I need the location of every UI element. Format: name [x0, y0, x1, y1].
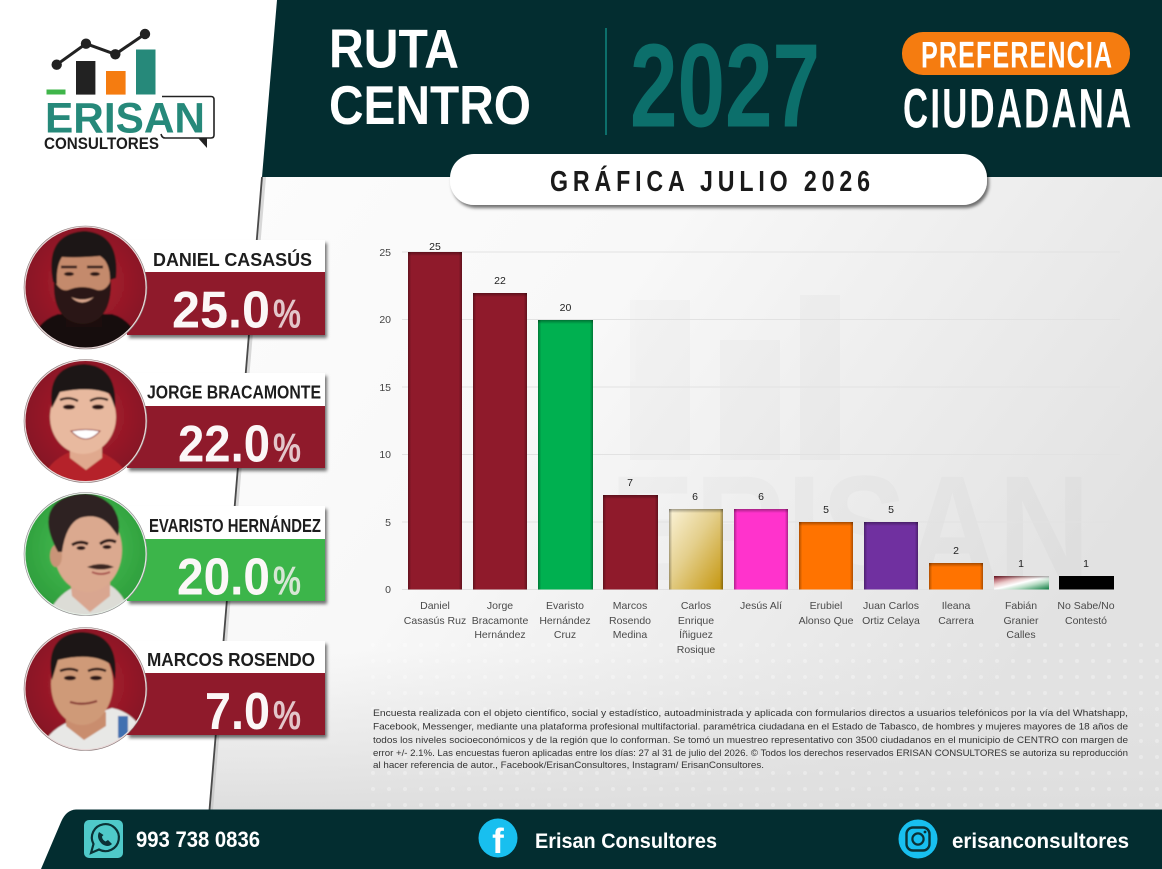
bar: Marcos Rosendo Medina: [603, 477, 658, 641]
bar: Carlos Enrique Íñiguez Rosique: Enrique: [678, 615, 714, 627]
bar: Juan Carlos Ortiz Celaya: 5: [888, 504, 894, 516]
bar: Marcos Rosendo Medina: Rosendo: [609, 615, 651, 627]
result card: Jorge Bracamonte: 22.0: [178, 416, 270, 474]
y axis labels: 25: [379, 247, 391, 259]
bar: Juan Carlos Ortiz Celaya: [862, 504, 920, 627]
icon: Facebook: [478, 818, 518, 861]
chart subtitle pill: GRÁFICA JULIO 2026: [550, 164, 870, 198]
title: Ruta Centro: CENTRO: [329, 74, 531, 136]
bar: Carlos Enrique Íñiguez Rosique: Íñiguez: [679, 628, 713, 641]
y axis labels: 0: [385, 584, 391, 596]
bar: Ileana Carrera: Ileana: [942, 600, 970, 612]
bar: Erubiel Alonso Que: [799, 504, 854, 627]
bar: Fabián Granier Calles: 1: [1018, 558, 1024, 570]
bar: Jorge Bracamonte Hernández: Jorge: [487, 600, 513, 612]
y axis labels: 15: [379, 382, 391, 394]
contact: WhatsApp: 993 738 0836: [136, 827, 260, 852]
bar: Marcos Rosendo Medina: Marcos: [613, 600, 647, 612]
methodology note: Facebook, Messenger, mediante una plataforma profesional multifactorial. paramétrica ciudadana en el Estado de Tabasco, de hombres y mujeres mayores de 18 años de: [373, 722, 1128, 732]
bar: Daniel Casasús Ruz: 25: [429, 241, 441, 253]
result card: Jorge Bracamonte: %: [273, 424, 301, 470]
contact: Instagram: [898, 820, 1129, 858]
contact: WhatsApp: [84, 820, 260, 858]
y axis labels: 10: [379, 449, 391, 461]
result card: Evaristo Hernández: EVARISTO HERNÁNDEZ: [149, 515, 321, 536]
bar: Evaristo Hernández Cruz: 20: [560, 302, 571, 314]
methodology note: Encuesta realizada con el objeto científico, social y estadístico, autoadministrada y aplicada con formularios directos a usuarios telefónicos por la vía del Whatshapp,: [373, 708, 1128, 718]
bar: Fabián Granier Calles: Calles: [1006, 629, 1036, 641]
portrait: Evaristo Hernández: [24, 492, 148, 618]
contact: Facebook: Erisan Consultores: [535, 830, 717, 853]
y axis labels: 20: [379, 314, 391, 326]
result card: Evaristo Hernández: [24, 492, 325, 618]
methodology note: [373, 708, 1128, 770]
bar: Daniel Casasús Ruz: Casasús Ruz: [404, 615, 466, 627]
bar: Carlos Enrique Íñiguez Rosique: 6: [692, 491, 698, 503]
y axis labels: 5: [385, 517, 391, 529]
bar: No Sabe/No Contestó: [1057, 558, 1115, 627]
bar: Jorge Bracamonte Hernández: Hernández: [474, 629, 526, 641]
bar: Carlos Enrique Íñiguez Rosique: Rosique: [677, 644, 715, 656]
contact: Instagram: erisanconsultores: [952, 830, 1129, 853]
bar: Evaristo Hernández Cruz: Hernández: [539, 615, 591, 627]
chart subtitle pill: [450, 154, 987, 205]
portrait: Marcos Rosendo: [24, 628, 148, 752]
result card: Marcos Rosendo: 7.0: [205, 683, 270, 741]
bar: Juan Carlos Ortiz Celaya: Ortiz Celaya: [862, 615, 920, 627]
result card: Evaristo Hernández: 20.0: [177, 548, 270, 606]
bar: Ileana Carrera: [929, 545, 983, 627]
portrait: Daniel Casasús: [24, 226, 148, 350]
bar: Evaristo Hernández Cruz: Evaristo: [546, 600, 584, 612]
bar: Erubiel Alonso Que: Alonso Que: [799, 615, 854, 627]
contact: Facebook: [478, 818, 717, 861]
bar: Jesús Alí: [734, 491, 788, 612]
icon: Facebook: f: [492, 822, 504, 861]
bar: No Sabe/No Contestó: No Sabe/No: [1057, 600, 1115, 612]
grid lines: [402, 252, 1120, 590]
bar: Carlos Enrique Íñiguez Rosique: Carlos: [681, 600, 711, 612]
panel divider: [209, 177, 266, 810]
title: Ruta Centro: [329, 18, 531, 136]
header band: [262, 0, 1162, 177]
result card: Daniel Casasús: [24, 226, 325, 350]
result card: Marcos Rosendo: MARCOS ROSENDO: [147, 650, 315, 670]
methodology note: error +/- 2.1%. Las encuestas fueron aplicadas entre los días: 27 al 31 de julio del 2026. © Todos los derechos reservados ERISAN CONSULTORES se autoriza su reproducción: [373, 748, 1128, 758]
portrait: Jorge Bracamonte: [24, 360, 148, 484]
bar: Marcos Rosendo Medina: 7: [627, 477, 633, 489]
icon: WhatsApp: [84, 820, 123, 858]
bar: Erubiel Alonso Que: Erubiel: [810, 600, 842, 612]
bar: Marcos Rosendo Medina: Medina: [613, 629, 647, 641]
title: year: 2027: [630, 20, 820, 152]
logo: [44, 29, 214, 153]
methodology note: todos los niveles socioeconómicos y de la región que lo conforman. Se tomó un muestreo representativo con 3500 ciudadanos en el municipio de CENTRO con margen de: [373, 735, 1128, 745]
methodology note: al hacer referencia de autor., Facebook/ErisanConsultores, Instagram/ ErisanConsultores.: [373, 760, 764, 770]
bar: Jorge Bracamonte Hernández: [472, 275, 528, 641]
bar: Evaristo Hernández Cruz: Cruz: [554, 629, 576, 641]
title: Ruta Centro: RUTA: [329, 18, 459, 80]
result card: Marcos Rosendo: [24, 628, 325, 752]
bar: Fabián Granier Calles: [994, 558, 1049, 641]
bar: Daniel Casasús Ruz: Daniel: [420, 600, 450, 612]
bar: Ileana Carrera: 2: [953, 545, 959, 557]
result card: Evaristo Hernández: %: [273, 558, 301, 604]
result card: Jorge Bracamonte: [24, 360, 325, 484]
bar: Fabián Granier Calles: Granier: [1003, 615, 1039, 627]
logo: ERISAN: [45, 94, 205, 142]
bar: No Sabe/No Contestó: 1: [1083, 558, 1089, 570]
icon: Instagram: [898, 820, 938, 858]
result card: Jorge Bracamonte: JORGE BRACAMONTE: [147, 382, 321, 402]
bar: Evaristo Hernández Cruz: [538, 302, 593, 641]
bar: Jorge Bracamonte Hernández: Bracamonte: [472, 615, 528, 627]
bar: Ileana Carrera: Carrera: [938, 615, 974, 627]
logo: CONSULTORES: [44, 134, 159, 153]
result card: Daniel Casasús: 25.0: [172, 282, 270, 340]
y axis labels: [379, 247, 391, 596]
bar: Jesús Alí: Jesús Alí: [740, 600, 782, 612]
result card: Daniel Casasús: %: [273, 290, 301, 336]
bar chart: [379, 241, 1120, 656]
bar: Daniel Casasús Ruz: [404, 241, 466, 627]
bar: No Sabe/No Contestó: Contestó: [1065, 615, 1107, 627]
bar: Juan Carlos Ortiz Celaya: Juan Carlos: [863, 600, 919, 612]
bar: Jesús Alí: 6: [758, 491, 764, 503]
bar: Jorge Bracamonte Hernández: 22: [494, 275, 506, 287]
preferencia pill: PREFERENCIA: [921, 34, 1112, 76]
header separator: [605, 28, 607, 135]
bar: Carlos Enrique Íñiguez Rosique: [669, 491, 723, 656]
result card: Marcos Rosendo: %: [273, 692, 301, 738]
footer band: [41, 810, 1162, 869]
result card: Daniel Casasús: DANIEL CASASÚS: [153, 249, 312, 270]
bar: Fabián Granier Calles: Fabián: [1005, 600, 1037, 612]
bar: Erubiel Alonso Que: 5: [823, 504, 829, 516]
ciudadana: CIUDADANA: [903, 77, 1131, 140]
left white panel: [0, 0, 277, 869]
